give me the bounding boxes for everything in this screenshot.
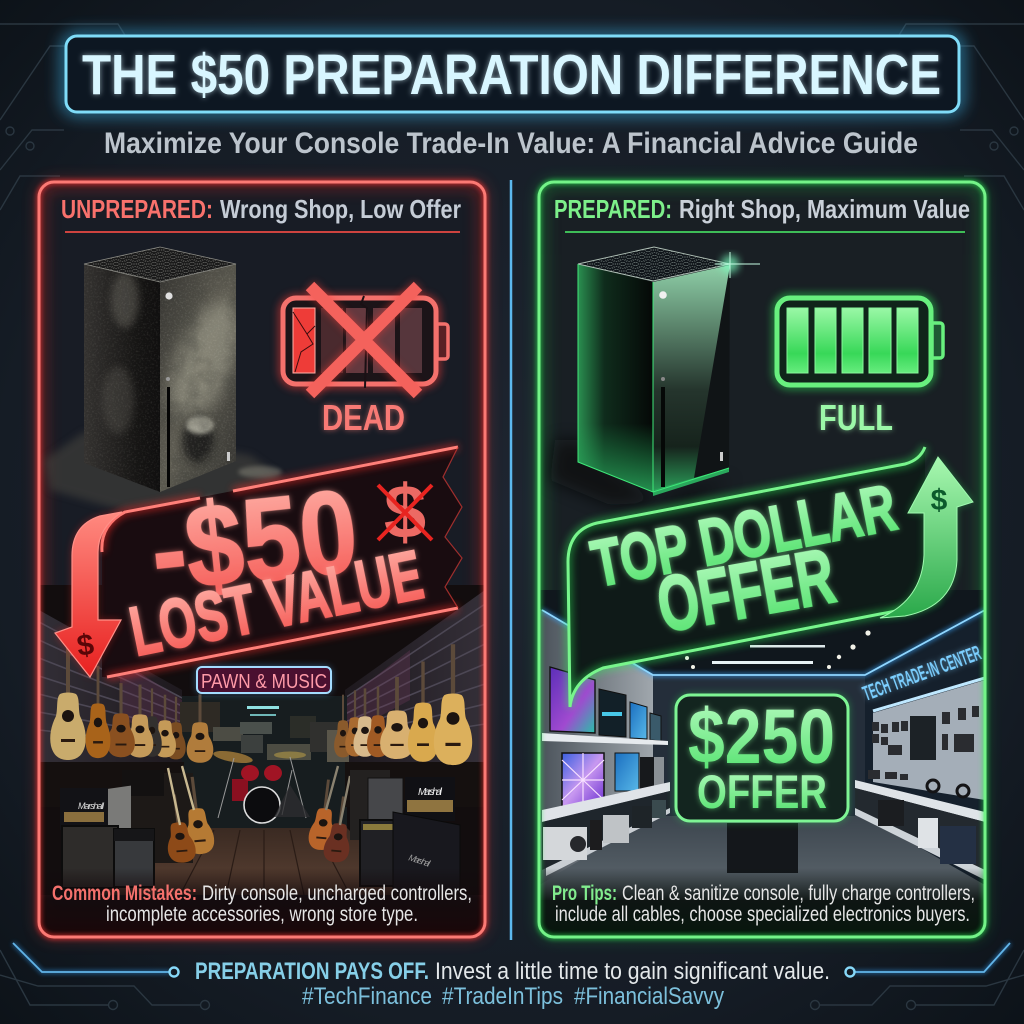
amps: right: Marshall <box>407 852 432 869</box>
guitars: left wall <box>50 646 186 760</box>
icon: full battery <box>776 297 943 386</box>
text: pro tips: Pro Tips: <box>552 882 617 905</box>
drum kit <box>212 749 310 823</box>
center divider <box>510 180 512 940</box>
text: pro tips <box>552 882 975 926</box>
text: lost value: LOST VALUE <box>123 535 429 671</box>
hashtags: #FinancialSavvy <box>574 983 724 1010</box>
tv shelves <box>542 667 670 876</box>
label: full: FULL <box>819 397 893 438</box>
heading: unprepared: Wrong Shop, Low Offer <box>220 194 461 224</box>
footer message: Invest a little time to gain significant value. <box>435 958 830 985</box>
hashtags <box>302 983 724 1010</box>
console: clean xbox <box>550 247 760 505</box>
battery cells <box>787 308 918 373</box>
icon: dead battery <box>282 286 448 394</box>
footer circuit: right <box>846 943 1010 976</box>
banner: lost value <box>55 447 462 677</box>
guitars: right wall <box>334 644 472 765</box>
scene: tech trade-in center <box>539 590 985 938</box>
price box: 250 offer <box>675 694 849 822</box>
amps: right <box>350 770 460 895</box>
icon: red x <box>310 286 418 394</box>
banner: top dollar offer <box>568 447 973 707</box>
price box: 250 offer: $250 <box>688 694 835 780</box>
arrow: up <box>880 457 973 618</box>
heading: prepared: PREPARED: <box>554 194 672 224</box>
title banner <box>65 36 960 112</box>
heading: prepared: Right Shop, Maximum Value <box>679 194 970 224</box>
arrow: up: $ <box>931 484 948 517</box>
icon: crossed coin: $ <box>384 470 426 555</box>
subtitle: Maximize Your Console Trade-In Value: A Financial Advice Guide <box>104 127 918 160</box>
pedestal <box>727 823 798 873</box>
amps: left: Marshall <box>78 801 105 811</box>
footer message: PREPARATION PAYS OFF. <box>195 958 429 985</box>
ceiling lights <box>685 630 871 669</box>
standing guitars: left <box>166 766 214 863</box>
text: common mistakes: Dirty console, uncharged controllers, <box>202 882 472 905</box>
text: common mistakes: incomplete accessories, wrong store type. <box>106 903 418 926</box>
arrow: down <box>55 512 122 677</box>
console: dirty xbox <box>44 247 285 510</box>
arrow: down: $ <box>75 628 96 663</box>
hashtags: #TechFinance <box>302 983 432 1010</box>
price box: 250 offer: OFFER <box>697 765 827 818</box>
text: offer: OFFER <box>651 531 841 649</box>
accessories wall <box>855 678 985 880</box>
heading: prepared <box>554 194 970 224</box>
footer circuit: left <box>13 943 178 976</box>
text: top dollar: TOP DOLLAR <box>586 469 902 601</box>
panel: prepared <box>538 181 986 938</box>
heading: unprepared <box>61 194 461 224</box>
standing guitars: right <box>308 766 350 862</box>
amps: right: Marshall <box>418 787 443 798</box>
panel: unprepared <box>38 181 486 938</box>
heading: unprepared: UNPREPARED: <box>61 194 213 224</box>
neon sign: pawn and music: PAWN & MUSIC <box>201 671 327 693</box>
amps: left <box>60 770 193 888</box>
value: minus 50: -$50 <box>145 465 364 618</box>
scene: pawn and music shop <box>39 585 485 938</box>
footer message <box>195 958 830 985</box>
label: dead: DEAD <box>322 397 405 438</box>
hashtags: #TradeInTips <box>442 983 563 1010</box>
text: common mistakes: Common Mistakes: <box>52 882 197 905</box>
text: common mistakes <box>52 882 472 926</box>
